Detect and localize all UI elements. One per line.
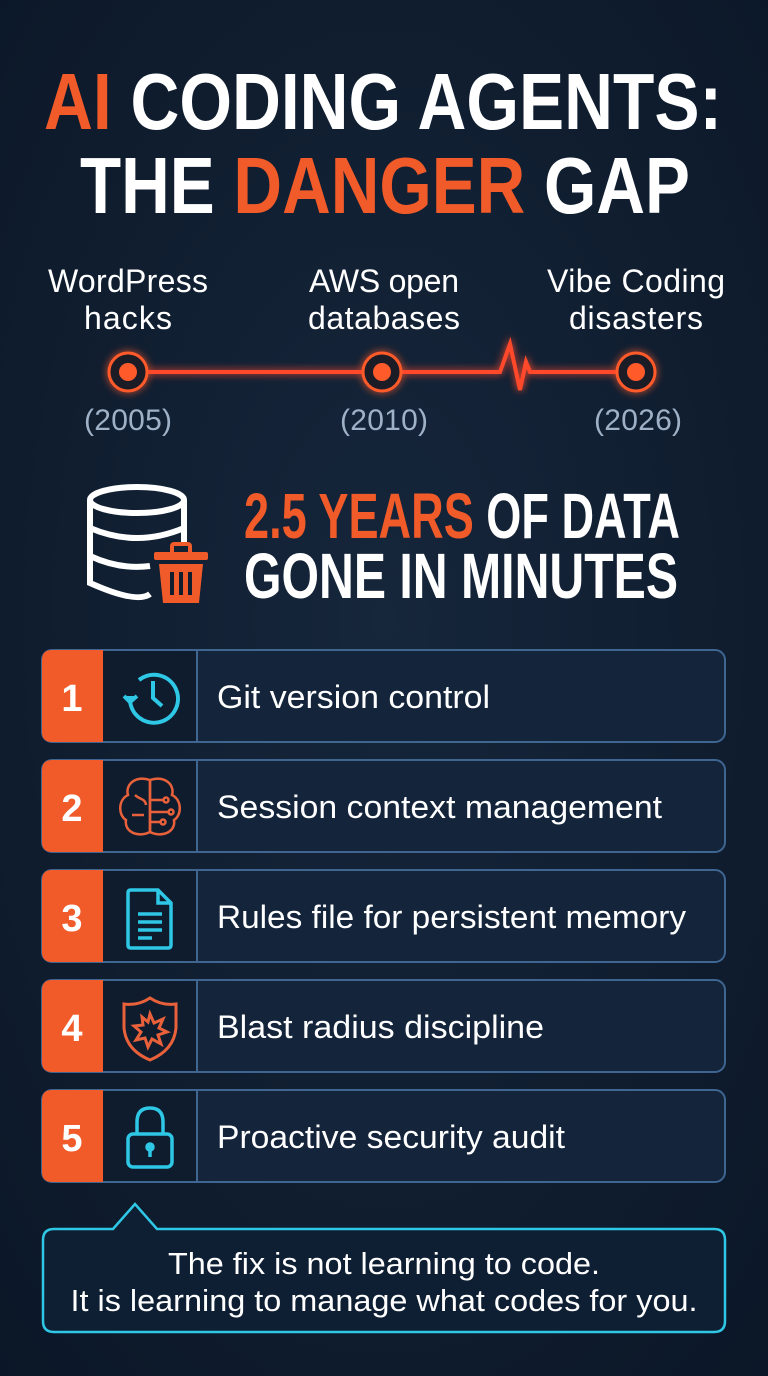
timeline labels: AWS open [309,263,459,299]
timeline labels: hacks [84,300,172,336]
timeline labels: databases [308,300,460,336]
icon: history clock [124,675,178,723]
headline: data loss: 2.5 YEARS OF DATA [244,480,680,552]
item 3 [42,870,725,962]
icon: brain [120,779,180,834]
callout: It is learning to manage what codes for you. [70,1283,698,1318]
list: 5 steps [42,650,725,1182]
timeline labels: Vibe Coding [547,263,725,299]
icon: shield blast [124,998,176,1060]
item 1: 1 [61,678,83,720]
timeline labels: disasters [569,300,703,336]
years: (2026) [594,404,682,437]
item 5 [42,1090,725,1182]
timeline labels [48,263,725,336]
timeline [48,263,725,437]
item 1: Git version control [217,679,490,715]
title: THE DANGER GAP [80,141,690,230]
callout: The fix is not learning to code. [168,1246,600,1281]
timeline line [109,344,655,391]
callout [43,1204,725,1332]
timeline labels: WordPress [48,263,208,299]
item 4 [42,980,725,1072]
item 4: 4 [61,1008,83,1050]
item 2: 2 [61,788,83,830]
item 2: Session context management [217,789,662,825]
years: (2005) [84,404,172,437]
years [84,404,682,437]
icon: padlock [128,1108,172,1167]
icon: document [128,890,171,948]
headline: data loss [244,480,680,612]
item 4: Blast radius discipline [217,1009,544,1045]
item 3: Rules file for persistent memory [217,899,686,935]
years: (2010) [340,404,428,437]
item 1 [42,650,725,742]
title [44,57,722,230]
item 5: 5 [61,1118,83,1160]
item 5: Proactive security audit [217,1119,565,1155]
item 2 [42,760,725,852]
item 3: 3 [61,898,83,940]
icon: database with trash [90,487,208,603]
